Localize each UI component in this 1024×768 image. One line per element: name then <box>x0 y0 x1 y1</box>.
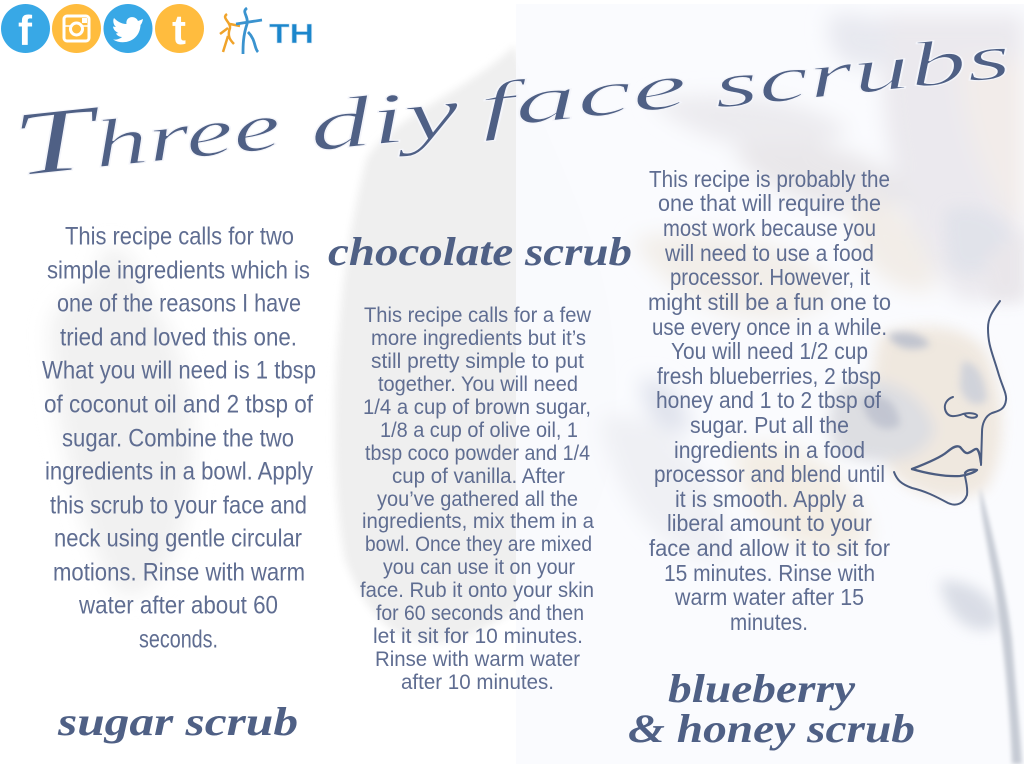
text block: chocolate scrub recipe: cup of vanilla. After <box>392 465 565 488</box>
text block: sugar scrub recipe: ingredients in a bowl. Apply <box>45 458 313 486</box>
text block: blueberry and honey scrub recipe: use every once in a while. <box>652 314 887 340</box>
text block: blueberry and honey scrub recipe: might still be a fun one to <box>648 289 891 315</box>
text block: chocolate scrub recipe <box>360 304 594 694</box>
text block: sugar scrub recipe: What you will need is 1 tbsp <box>42 356 316 384</box>
text block: chocolate scrub recipe: This recipe calls for a few <box>364 304 592 327</box>
text block: chocolate scrub recipe: together. You will need <box>378 373 578 396</box>
text block: blueberry and honey scrub recipe: warm water after 15 <box>674 584 864 610</box>
text block: sugar scrub recipe: tried and loved this one. <box>60 324 297 352</box>
text block: sugar scrub recipe: neck using gentle circular <box>54 524 302 552</box>
text block: blueberry and honey scrub recipe: liberal amount to your <box>667 510 872 536</box>
text block: blueberry and honey scrub recipe: honey and 1 to 2 tbsp of <box>656 387 882 413</box>
text block: sugar scrub recipe: this scrub to your face and <box>50 492 307 520</box>
plant stem <box>980 487 1022 764</box>
text block: sugar scrub recipe: sugar. Combine the two <box>62 424 294 452</box>
icon: tumblr <box>155 4 204 53</box>
heading: chocolate scrub: chocolate scrub <box>328 229 632 274</box>
text block: blueberry and honey scrub recipe: This recipe is probably the <box>649 166 890 192</box>
icon: twitter <box>104 4 152 53</box>
text block: blueberry and honey scrub recipe: it is smooth. Apply a <box>675 486 864 512</box>
icon: instagram <box>52 4 101 53</box>
watercolor blob: centre <box>335 45 619 642</box>
text block: blueberry and honey scrub recipe: ingredients in a food <box>674 437 865 463</box>
logo: TH <box>220 8 314 54</box>
social icons <box>1 4 204 54</box>
text block: sugar scrub recipe: This recipe calls for two <box>65 222 294 250</box>
title: T hree <box>7 66 285 196</box>
text block: sugar scrub recipe: water after about 60 <box>78 592 278 620</box>
heading: sugar scrub: sugar scrub <box>57 699 298 744</box>
title <box>7 20 1014 196</box>
title: scrubs <box>710 20 1014 122</box>
text block: blueberry and honey scrub recipe: processor and blend until <box>654 461 885 487</box>
text block: chocolate scrub recipe: after 10 minutes. <box>401 671 554 694</box>
logo: TH: TH <box>269 18 314 49</box>
text block: blueberry and honey scrub recipe: processor. However, it <box>670 264 871 290</box>
title: diy <box>305 72 463 167</box>
title: face <box>476 50 690 142</box>
text block: blueberry and honey scrub recipe: most work because you <box>663 215 876 241</box>
text block: chocolate scrub recipe: Rinse with warm water <box>375 648 580 671</box>
text block: sugar scrub recipe <box>42 222 316 654</box>
text block: blueberry and honey scrub recipe: face and allow it to sit for <box>649 535 890 561</box>
text block: chocolate scrub recipe: still pretty simple to put <box>371 350 584 373</box>
icon: line-art face <box>894 301 1006 505</box>
text block: chocolate scrub recipe: more ingredients but it’s <box>371 327 586 350</box>
heading: blueberry & honey scrub: blueberry <box>668 666 855 711</box>
text block: chocolate scrub recipe: ingredients, mix them in a <box>362 510 594 533</box>
icon: tumblr: t <box>172 6 186 53</box>
text block: blueberry and honey scrub recipe <box>648 166 891 635</box>
icon: facebook <box>1 4 50 54</box>
text block: blueberry and honey scrub recipe: 15 minutes. Rinse with <box>664 560 875 586</box>
watercolor blob: left <box>50 245 194 596</box>
text block: sugar scrub recipe: motions. Rinse with warm <box>53 558 305 586</box>
text block: blueberry and honey scrub recipe: sugar. Put all the <box>690 412 849 438</box>
text block: chocolate scrub recipe: bowl. Once they are mixed <box>365 533 592 556</box>
text block: chocolate scrub recipe: face. Rub it onto your skin <box>360 579 594 602</box>
icon: facebook: f <box>18 7 33 54</box>
background photo panel <box>516 4 1024 764</box>
text block: sugar scrub recipe: seconds. <box>139 626 218 654</box>
text block: sugar scrub recipe: of coconut oil and 2 tbsp of <box>44 390 313 418</box>
text block: sugar scrub recipe: one of the reasons I have <box>57 290 301 318</box>
text block: chocolate scrub recipe: tbsp coco powder and 1/4 <box>365 442 590 465</box>
text block: chocolate scrub recipe: 1/4 a cup of brown sugar, <box>363 396 591 419</box>
text block: chocolate scrub recipe: 1/8 a cup of olive oil, 1 <box>380 419 578 442</box>
text block: sugar scrub recipe: simple ingredients which is <box>47 256 310 284</box>
heading: blueberry & honey scrub: & honey scrub <box>628 706 915 751</box>
heading: blueberry & honey scrub <box>628 666 915 751</box>
text block: blueberry and honey scrub recipe: fresh blueberries, 2 tbsp <box>657 363 881 389</box>
text block: blueberry and honey scrub recipe: minutes. <box>730 609 808 635</box>
text block: blueberry and honey scrub recipe: one that will require the <box>658 190 881 216</box>
text block: chocolate scrub recipe: for 60 seconds and then <box>376 602 584 625</box>
text block: chocolate scrub recipe: you can use it on your <box>383 556 575 579</box>
text block: chocolate scrub recipe: let it sit for 10 minutes. <box>373 625 583 648</box>
text block: blueberry and honey scrub recipe: will need to use a food <box>664 240 874 266</box>
text block: chocolate scrub recipe: you’ve gathered all the <box>377 488 578 511</box>
text block: blueberry and honey scrub recipe: You will need 1/2 cup <box>671 338 868 364</box>
